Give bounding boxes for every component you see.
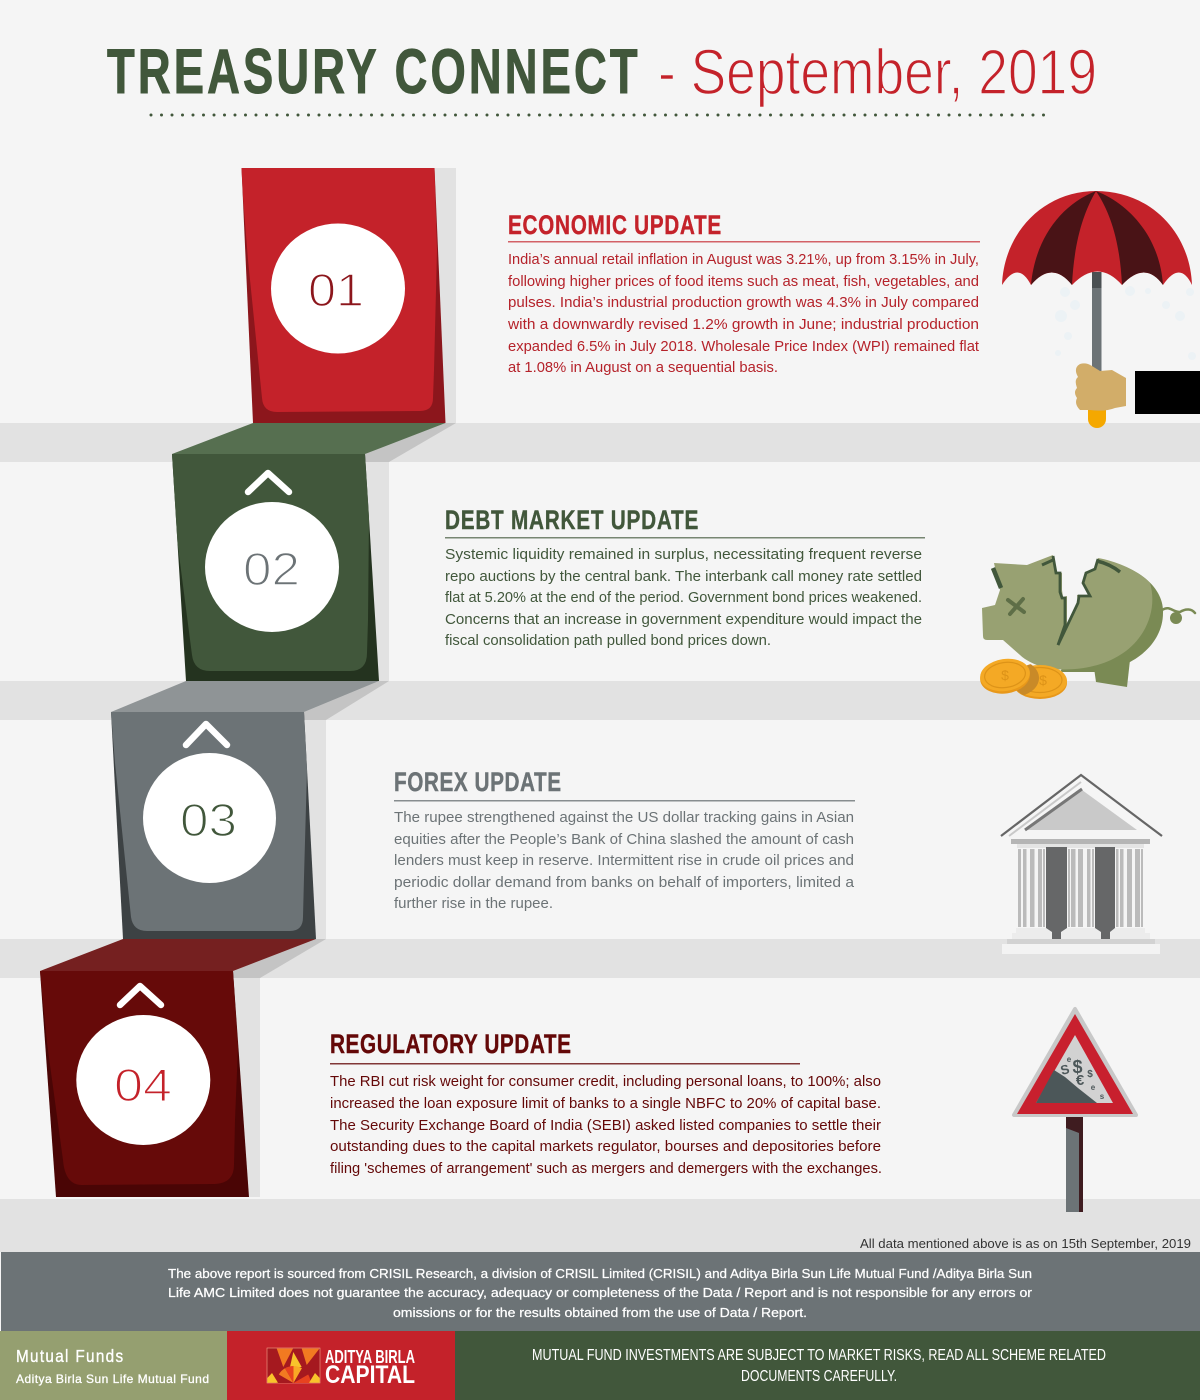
disclaimer band: omissions or for the results obtained from the use of Data / Report. bbox=[393, 1305, 807, 1320]
panel: step 02 bbox=[172, 423, 456, 681]
section: regulatory update bbox=[330, 1029, 882, 1177]
section: economic update: India’s annual retail inflation in August was 3.21%, up from 3.15% in July, bbox=[508, 251, 979, 268]
panel: step 04: 04 bbox=[114, 1059, 172, 1111]
section: regulatory update: filing 'schemes of arrangement' such as mergers and demergers with the exchanges. bbox=[330, 1160, 882, 1177]
disclaimer band: Life AMC Limited does not guarantee the accuracy, adequacy or completeness of the Data / Report and is not responsible for any errors or bbox=[168, 1285, 1033, 1300]
icon: bank building bbox=[1001, 775, 1162, 954]
icon: warning road sign: $ bbox=[1072, 1057, 1083, 1077]
section: debt market update: repo auctions by the central bank. The interbank call money rate settled bbox=[445, 568, 922, 585]
section: forex update: equities after the People’s Bank of China slashed the amount of cash bbox=[394, 831, 854, 848]
footer: aditya birla capital logo bbox=[227, 1331, 455, 1400]
section: debt market update: fiscal consolidation path pulled bond prices down. bbox=[445, 632, 771, 649]
section: regulatory update: The Security Exchange Board of India (SEBI) asked listed companies to settle their bbox=[330, 1117, 881, 1134]
panel: step 04 bbox=[40, 939, 326, 1197]
footer: mutual funds block: Mutual Funds bbox=[16, 1346, 123, 1366]
section: economic update: following higher prices of food items such as meat, fish, vegetables, and bbox=[508, 273, 979, 290]
icon: broken piggy bank with coins: $ bbox=[1001, 667, 1009, 683]
icon: umbrella and hand bbox=[1002, 191, 1200, 428]
disclaimer band: The above report is sourced from CRISIL Research, a division of CRISIL Limited (CRISIL) and Aditya Birla Sun Life Mutual Fund /Aditya Birla Sun bbox=[168, 1266, 1032, 1281]
panel: step 01: 01 bbox=[308, 264, 364, 316]
title: TREASURY CONNECT bbox=[107, 36, 638, 107]
section: forex update: further rise in the rupee. bbox=[394, 895, 553, 912]
panel: step 03 bbox=[111, 681, 389, 939]
section: debt market update: Concerns that an increase in government expenditure would impact the bbox=[445, 611, 922, 628]
section: forex update: FOREX UPDATE bbox=[394, 767, 561, 798]
section: economic update: at 1.08% in August on a sequential basis. bbox=[508, 359, 778, 376]
panel: step 02: 02 bbox=[243, 543, 300, 595]
title: - September, 2019 bbox=[658, 36, 1097, 108]
title bbox=[107, 36, 1097, 115]
section: forex update: lenders must keep in reserve. Intermittent rise in crude oil prices and bbox=[394, 852, 854, 869]
panel: step 01 bbox=[242, 168, 456, 423]
icon: warning road sign: e bbox=[1091, 1083, 1096, 1092]
disclaimer band bbox=[1, 1252, 1200, 1331]
section: regulatory update: REGULATORY UPDATE bbox=[330, 1029, 571, 1060]
section: regulatory update: increased the loan exposure limit of banks to a single NBFC to 20% of capital base. bbox=[330, 1095, 881, 1112]
section: debt market update bbox=[445, 505, 925, 649]
data date note: All data mentioned above is as on 15th September, 2019 bbox=[860, 1236, 1191, 1251]
section: economic update bbox=[507, 210, 980, 376]
footer: aditya birla capital logo: CAPITAL bbox=[325, 1361, 415, 1389]
icon: broken piggy bank with coins bbox=[978, 555, 1195, 699]
section: economic update: ECONOMIC UPDATE bbox=[508, 210, 721, 241]
section: regulatory update: outstanding dues to the capital markets regulator, bourses and depositories before bbox=[330, 1138, 881, 1155]
section: forex update: periodic dollar demand from banks on behalf of importers, limited a bbox=[394, 874, 855, 891]
icon: warning road sign: S bbox=[1059, 1061, 1071, 1078]
icon: broken piggy bank with coins: $ bbox=[1039, 672, 1047, 688]
footer: mutual funds block bbox=[0, 1331, 227, 1400]
footer: mutual funds block: Aditya Birla Sun Life Mutual Fund bbox=[16, 1372, 209, 1386]
icon: warning road sign: s bbox=[1100, 1092, 1105, 1101]
icon: warning road sign: $ bbox=[1087, 1069, 1093, 1080]
section: forex update: The rupee strengthened against the US dollar tracking gains in Asian bbox=[394, 809, 854, 826]
icon: warning road sign: e bbox=[1067, 1055, 1072, 1064]
icon: warning road sign bbox=[1014, 1009, 1136, 1212]
footer: risk statement bbox=[455, 1331, 1200, 1400]
section: economic update: expanded 6.5% in July 2018. Wholesale Price Index (WPI) remained flat bbox=[508, 338, 980, 355]
footer: risk statement: DOCUMENTS CAREFULLY. bbox=[741, 1368, 897, 1385]
section: forex update bbox=[394, 767, 855, 912]
footer: aditya birla capital logo: ADITYA BIRLA bbox=[325, 1347, 415, 1367]
section: economic update: pulses. India’s industrial production growth was 4.3% in July compared bbox=[508, 294, 979, 311]
section: economic update: with a downwardly revised 1.2% growth in June; industrial production bbox=[507, 316, 979, 333]
section: debt market update: DEBT MARKET UPDATE bbox=[445, 505, 698, 536]
icon: warning road sign: € bbox=[1076, 1072, 1085, 1089]
panel: step 03: 03 bbox=[180, 794, 237, 846]
section: debt market update: flat at 5.20% at the end of the period. Government bond prices weakened. bbox=[445, 589, 922, 606]
section: debt market update: Systemic liquidity remained in surplus, necessitating frequent reverse bbox=[445, 546, 922, 563]
section: regulatory update: The RBI cut risk weight for consumer credit, including personal loans, to 100%; also bbox=[330, 1073, 881, 1090]
